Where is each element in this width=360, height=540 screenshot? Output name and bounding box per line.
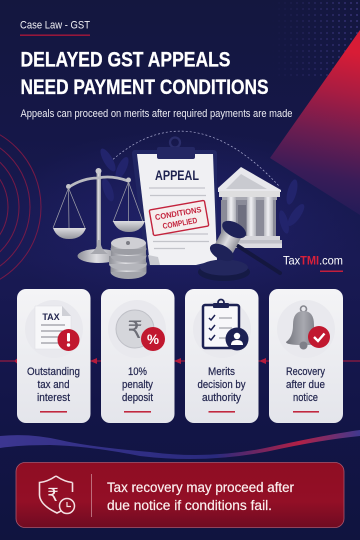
icon: gavel xyxy=(198,217,280,281)
card text xyxy=(27,366,80,404)
card text: Merits xyxy=(208,366,235,378)
stamp: CONDITIONS xyxy=(154,205,203,222)
heading: appeal: APPEAL xyxy=(155,168,199,183)
card: outstanding tax and interest xyxy=(17,289,90,423)
icon: bell xyxy=(277,300,335,358)
laurel leaves xyxy=(98,146,307,235)
icon: rupee coin xyxy=(108,300,166,358)
card text: notice xyxy=(293,392,318,404)
stamp: COMPLIED xyxy=(162,216,198,231)
card text xyxy=(198,366,246,404)
card text: penalty xyxy=(122,379,153,391)
card text: Recovery xyxy=(286,366,325,378)
icon: shield rupee clock: ₹ xyxy=(47,485,59,505)
banner text xyxy=(107,480,294,513)
red diagonal accent xyxy=(270,30,360,215)
icon: tax document: TAX xyxy=(42,312,60,322)
background xyxy=(0,2,360,420)
banner text: Tax recovery may proceed after xyxy=(107,480,294,495)
icon: rupee coin: % xyxy=(147,332,159,347)
card text: after due xyxy=(286,379,325,391)
clip xyxy=(157,138,195,159)
paper curl xyxy=(148,255,160,265)
paper lines xyxy=(149,188,209,248)
card text: interest xyxy=(37,392,70,404)
paper xyxy=(137,154,217,265)
dashed arc xyxy=(110,131,279,186)
card text: authority xyxy=(202,392,241,404)
stamp xyxy=(149,200,209,236)
banner xyxy=(16,462,344,528)
card: recovery after due notice xyxy=(269,289,343,423)
card text: Outstanding xyxy=(27,366,80,378)
card text: 10% xyxy=(128,366,147,378)
concentric arcs xyxy=(0,123,41,291)
clipboard xyxy=(132,138,217,266)
title: NEED PAYMENT CONDITIONS xyxy=(20,75,268,99)
icon: temple xyxy=(218,167,282,248)
board xyxy=(132,150,217,266)
card text: deposit xyxy=(122,392,153,404)
card: penalty deposit xyxy=(101,289,174,423)
title: DELAYED GST APPEALS xyxy=(20,48,230,72)
connector line xyxy=(0,358,360,364)
card text xyxy=(122,366,153,404)
card text: tax and xyxy=(38,379,70,391)
icon: shield rupee clock xyxy=(40,476,74,514)
logo: taxtmi: TaxTMI.com xyxy=(283,254,343,268)
label: case law xyxy=(20,20,90,36)
icon: scales xyxy=(53,168,145,263)
icon: checklist xyxy=(193,300,251,358)
icon: rupee coin: ₹ xyxy=(127,317,143,344)
icon: coins xyxy=(109,237,147,279)
banner text: due notice if conditions fail. xyxy=(107,498,272,513)
card text xyxy=(286,366,325,404)
card: merits decision xyxy=(185,289,258,423)
label: case law: Case Law - GST xyxy=(20,20,90,32)
wave ribbon xyxy=(0,430,360,459)
card text: decision by xyxy=(198,379,246,391)
title xyxy=(20,48,268,99)
subtitle: Appeals can proceed on merits after required payments are made xyxy=(20,108,292,120)
